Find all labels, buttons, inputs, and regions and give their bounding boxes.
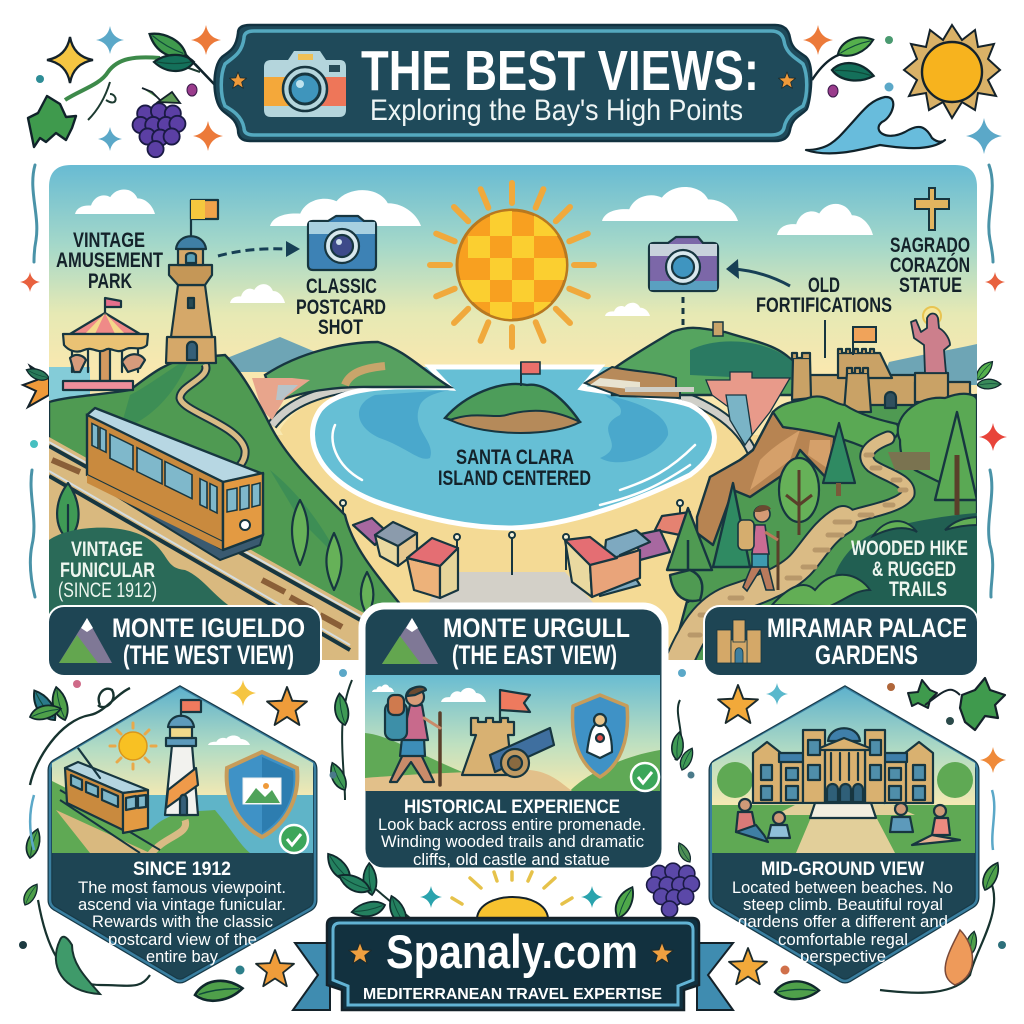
text block bbox=[78, 859, 286, 966]
bay water bbox=[312, 367, 714, 528]
label: classic postcard shot bbox=[296, 275, 386, 339]
left conifers bbox=[667, 483, 750, 603]
ground below tracks bbox=[49, 470, 360, 665]
label: sagrado corazon statue: SAGRADO bbox=[890, 234, 970, 257]
flag on castle bbox=[853, 327, 876, 355]
tagline: MEDITERRANEAN TRAVEL EXPERTISE bbox=[363, 986, 662, 1003]
header banner bbox=[214, 25, 811, 141]
shield bbox=[227, 752, 297, 837]
dark corner right bbox=[834, 513, 977, 614]
ribbon tails bbox=[293, 943, 330, 1010]
ground base bbox=[277, 435, 760, 649]
green over castle foot bbox=[773, 396, 899, 450]
text block bbox=[732, 859, 953, 966]
text block: gardens offer a different and bbox=[738, 912, 948, 931]
label: santa clara: ISLAND CENTERED bbox=[438, 467, 591, 490]
trail bbox=[680, 438, 908, 660]
far mountains bbox=[227, 337, 977, 385]
text block: perspective bbox=[800, 947, 886, 966]
carousel bbox=[63, 298, 148, 390]
tag: Monte Igueldo: MONTE IGUELDO bbox=[112, 613, 305, 643]
label: vintage amusement park: PARK bbox=[88, 270, 132, 293]
label: vintage amusement park: VINTAGE bbox=[73, 229, 145, 252]
castle: old fortifications bbox=[792, 349, 970, 412]
tall right tree bbox=[935, 412, 977, 515]
label: classic postcard shot: CLASSIC bbox=[306, 275, 377, 298]
panel: Monte Urgull: MONTE URGULL bbox=[443, 613, 630, 643]
beach bbox=[280, 396, 734, 435]
big bush bbox=[898, 394, 977, 500]
check badge bbox=[280, 825, 308, 853]
left small tree bbox=[57, 483, 79, 545]
icon: blue camera bbox=[308, 216, 376, 270]
side decorations of main panel bbox=[20, 165, 1007, 597]
text block: Located between beaches. No bbox=[732, 878, 953, 897]
icon: purple camera bbox=[649, 237, 718, 291]
arrow: fortifications to camera bbox=[726, 259, 790, 286]
label: wooded hike: TRAILS bbox=[889, 578, 947, 601]
text block: cliffs, old castle and statue bbox=[413, 850, 610, 869]
label: vintage amusement park: AMUSEMENT bbox=[56, 249, 163, 272]
icon: mountain bbox=[382, 618, 438, 664]
bottom-right town bbox=[565, 512, 690, 597]
sky bbox=[49, 165, 977, 435]
footer leaves and grapes bbox=[322, 841, 699, 928]
panel: Monte Urgull bbox=[362, 606, 665, 871]
palace bbox=[753, 728, 933, 818]
trees on slope bbox=[292, 500, 373, 615]
title: THE BEST VIEWS: bbox=[361, 39, 759, 103]
lamps bbox=[340, 500, 683, 575]
footer sun bbox=[420, 872, 603, 918]
label: vintage funicular: FUNICULAR bbox=[60, 559, 155, 582]
subtitle: Exploring the Bay's High Points bbox=[370, 94, 743, 127]
text block: Rewards with the classic bbox=[92, 912, 273, 931]
right hill and forest bbox=[667, 349, 977, 670]
text block: ascend via vintage funicular. bbox=[78, 895, 286, 914]
label: classic postcard shot: SHOT bbox=[318, 316, 363, 339]
text block: comfortable regal bbox=[778, 930, 908, 949]
label: santa clara: SANTA CLARA bbox=[456, 446, 574, 469]
right headland bbox=[585, 322, 793, 398]
decoration: left hexagon vines and stars bbox=[19, 680, 307, 1003]
text block: postcard view of the bbox=[108, 930, 257, 949]
label: sagrado corazon statue: STATUE bbox=[899, 274, 962, 297]
tag: Miramar Palace Gardens: MIRAMAR PALACE bbox=[767, 613, 967, 643]
panel: Monte Urgull: (THE EAST VIEW) bbox=[452, 640, 617, 670]
panel: Miramar hexagon bbox=[710, 688, 978, 981]
bottom-left town bbox=[353, 518, 458, 598]
footer banner bbox=[293, 918, 733, 1010]
decoration: right hexagon leaves and stars bbox=[718, 678, 1006, 1000]
green slope left bbox=[49, 354, 400, 613]
tracks bbox=[49, 437, 380, 660]
hiker bbox=[738, 505, 778, 591]
brand name: Spanaly.com bbox=[386, 925, 638, 978]
text block: SINCE 1912 bbox=[133, 859, 231, 880]
illustration: funicular and lighthouse bbox=[50, 688, 316, 855]
decoration: central vines bbox=[326, 669, 696, 800]
label: santa clara bbox=[438, 446, 591, 490]
check badge bbox=[631, 763, 659, 791]
text block: MID-GROUND VIEW bbox=[761, 859, 924, 880]
lighthouse bbox=[166, 200, 218, 363]
header decoration: right leaves, sun and wave bbox=[803, 25, 1002, 154]
visitors bbox=[736, 799, 960, 845]
tag: Miramar Palace Gardens: GARDENS bbox=[815, 640, 918, 670]
label: wooded hike: & RUGGED bbox=[872, 558, 956, 581]
header decoration: left vine and sparkles bbox=[28, 25, 223, 157]
clouds bbox=[75, 187, 873, 316]
label: classic postcard shot: POSTCARD bbox=[296, 296, 386, 319]
text block: The most famous viewpoint. bbox=[78, 878, 286, 897]
dark corner left bbox=[49, 528, 228, 614]
right town bbox=[706, 372, 790, 445]
label: wooded hike bbox=[851, 537, 968, 601]
label: sagrado corazon statue bbox=[890, 234, 970, 297]
left headland bbox=[265, 342, 450, 402]
lighthouse bbox=[165, 700, 201, 815]
bushes bbox=[772, 517, 977, 606]
text block: Winding wooded trails and dramatic bbox=[381, 832, 644, 851]
tram bbox=[65, 748, 148, 833]
funicular train bbox=[87, 408, 263, 560]
pointer line bbox=[824, 320, 826, 358]
text block: HISTORICAL EXPERIENCE bbox=[404, 797, 620, 818]
conifer bbox=[823, 423, 855, 496]
label: sagrado corazon statue: CORAZÓN bbox=[890, 253, 970, 277]
island: Santa Clara bbox=[445, 362, 580, 433]
label: vintage amusement park bbox=[56, 229, 163, 293]
arrow: lighthouse to camera bbox=[218, 241, 300, 257]
tag: Miramar Palace Gardens bbox=[705, 607, 977, 675]
dashed pointer bbox=[682, 297, 684, 325]
icon: palace bbox=[717, 620, 761, 663]
text block: Look back across entire promenade. bbox=[378, 815, 646, 834]
banner shape bbox=[214, 25, 811, 141]
label: vintage funicular bbox=[58, 538, 157, 602]
label: wooded hike: WOODED HIKE bbox=[851, 537, 968, 560]
illustration: hiker and castle bbox=[365, 675, 660, 791]
label: old fortifications bbox=[756, 274, 892, 317]
cliff bbox=[697, 412, 835, 545]
text block bbox=[378, 797, 646, 869]
panel: Monte Igueldo hexagon bbox=[50, 688, 316, 981]
sun bbox=[110, 723, 156, 769]
icon: cross bbox=[915, 188, 949, 230]
panel: bay illustration bbox=[49, 165, 977, 670]
round tree bbox=[779, 458, 819, 535]
left town bbox=[252, 378, 310, 420]
icon: mountain bbox=[59, 618, 112, 663]
label: vintage funicular: VINTAGE bbox=[71, 538, 143, 561]
label: vintage funicular: (SINCE 1912) bbox=[58, 579, 157, 602]
statue bbox=[911, 307, 950, 373]
text block: steep climb. Beautiful royal bbox=[743, 895, 943, 914]
tag: Monte Igueldo: (THE WEST VIEW) bbox=[123, 640, 294, 670]
label: old fortifications: OLD bbox=[808, 274, 840, 297]
far sea bbox=[49, 367, 610, 400]
icon: camera bbox=[264, 51, 346, 117]
bottom promenade bbox=[429, 572, 593, 602]
hillside path bbox=[180, 364, 245, 472]
illustration: palace and gardens bbox=[710, 688, 978, 855]
sun bbox=[430, 183, 594, 347]
tag: Monte Igueldo bbox=[49, 607, 320, 675]
label: old fortifications: FORTIFICATIONS bbox=[756, 294, 892, 317]
text block: entire bay bbox=[146, 947, 218, 966]
